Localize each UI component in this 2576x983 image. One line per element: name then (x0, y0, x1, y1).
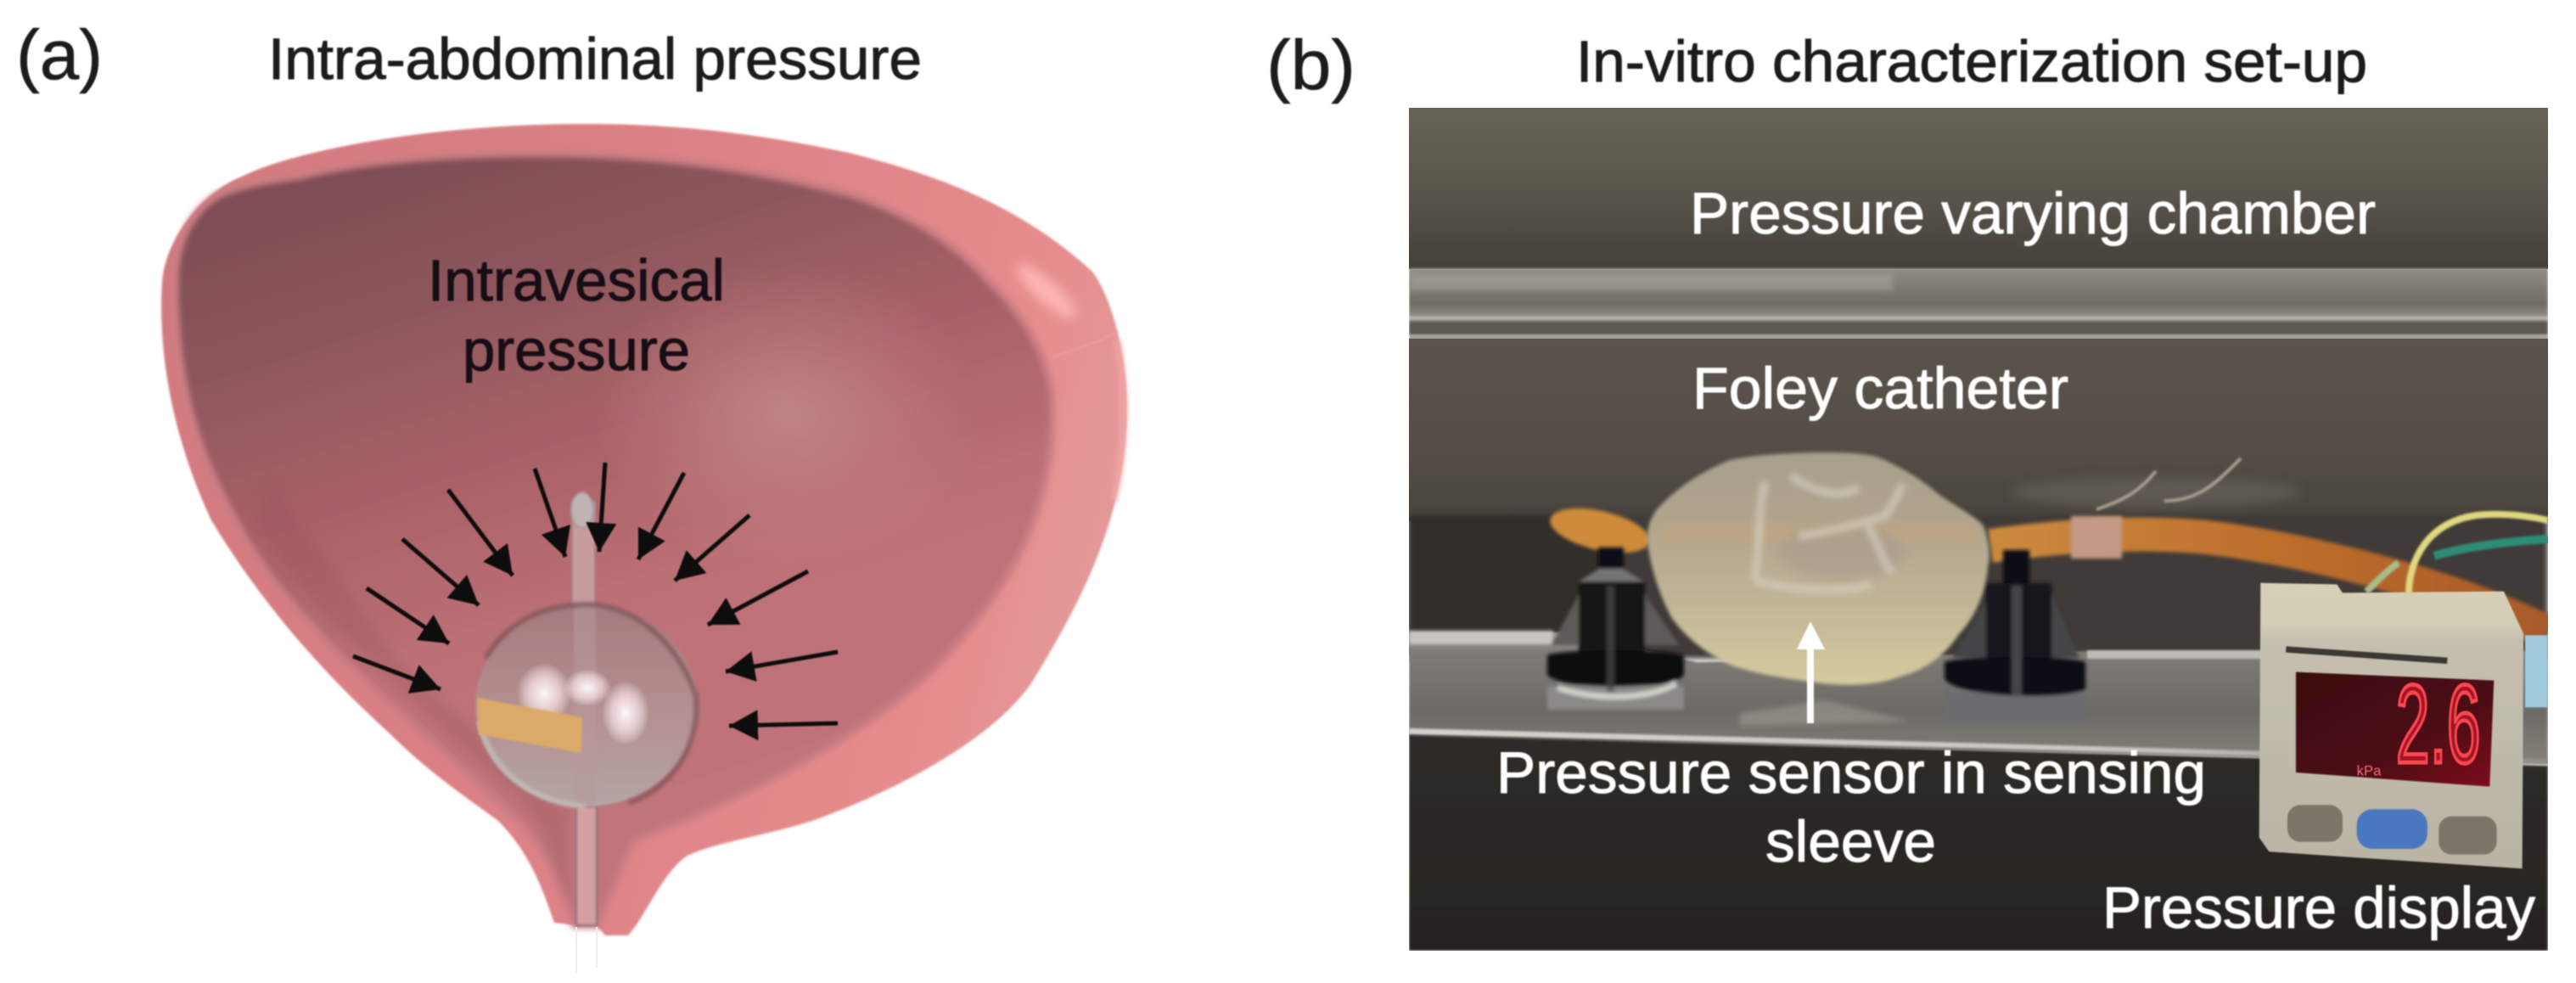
label: Intravesical pressure (428, 248, 725, 383)
label: Intravesical pressure: pressure (463, 317, 690, 383)
white arrow to sensor (1797, 621, 1825, 723)
heading: In-vitro characterization set-up: In-vitro characterization set-up (1576, 29, 2367, 94)
photo background: chamber (1409, 108, 2548, 951)
photo labels: Pressure sensor in sensing (1496, 740, 2206, 806)
catheter tube (571, 492, 597, 973)
screen (2296, 672, 2494, 787)
heading: Intra-abdominal pressure: Intra-abdominal pressure (268, 26, 922, 92)
panel: in-vitro photo (1409, 108, 2548, 951)
wires (2366, 514, 2548, 594)
photo labels: sleeve (1765, 809, 1936, 874)
label: (a): (a) (16, 15, 103, 94)
right button (2439, 817, 2497, 855)
sensing balloon sphere (475, 604, 698, 806)
panel: bladder cross-section (161, 124, 1127, 973)
pressure display device (2259, 583, 2548, 868)
unit label: kPa (2357, 762, 2382, 778)
pressure arrows (353, 463, 838, 726)
photo labels: Foley catheter (1692, 356, 2068, 421)
photo labels: Pressure varying chamber (1690, 181, 2376, 246)
bladder wall (161, 124, 1127, 935)
photo labels: Pressure display (2102, 875, 2535, 941)
centre button (2357, 809, 2427, 849)
left button (2287, 805, 2343, 842)
label: (b): (b) (1266, 25, 1355, 104)
label: Intravesical pressure: Intravesical (428, 248, 725, 313)
catheter (1546, 458, 2548, 632)
photo labels (1496, 181, 2535, 941)
pressure sensor patch (477, 698, 582, 753)
display body (2259, 583, 2523, 868)
sensing sleeve balloon (1647, 452, 1990, 685)
bladder cavity (175, 154, 1052, 925)
clamp stands (1547, 548, 2086, 722)
digits 2.6: 2.6 (2396, 661, 2481, 786)
